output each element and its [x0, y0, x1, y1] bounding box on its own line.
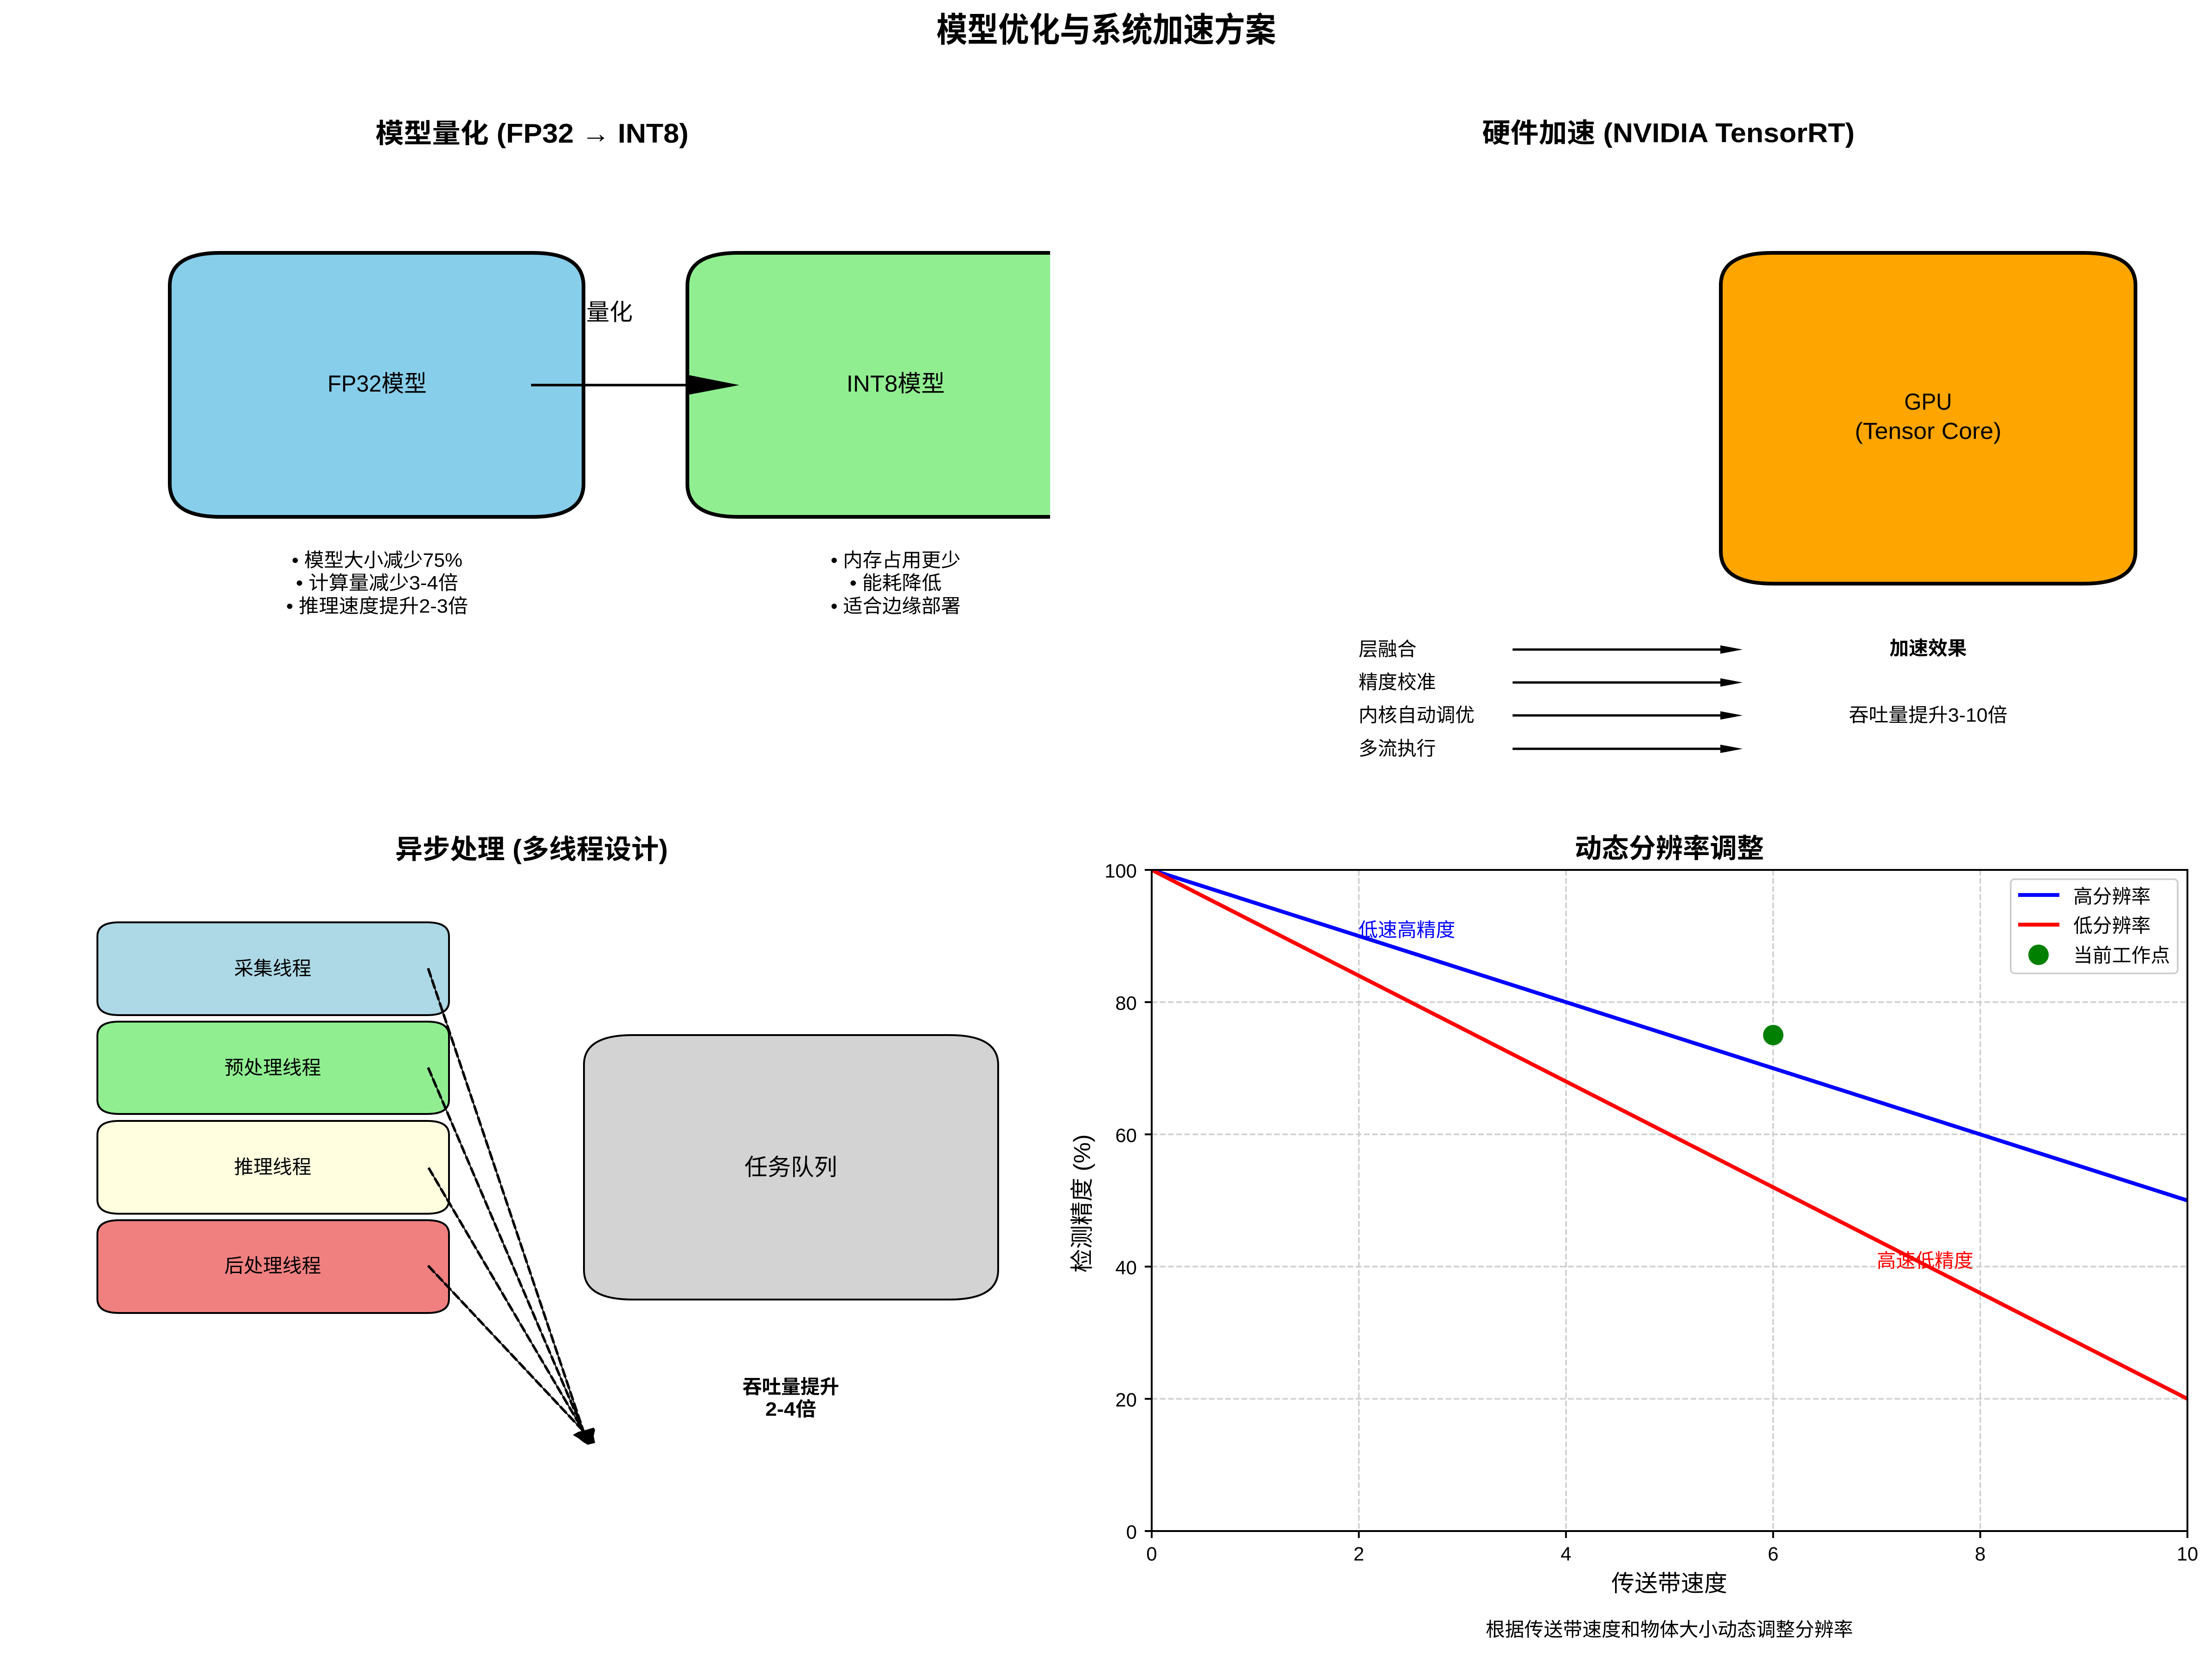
text block: FP32 benefits: • 计算量减少3-4倍	[296, 572, 458, 594]
arrows: threads to queue	[428, 968, 595, 1445]
heading: hardware acceleration: 硬件加速 (NVIDIA TensorRT)	[1482, 118, 1854, 148]
box: postprocessing thread	[97, 1220, 449, 1313]
label: GPU: GPU	[1904, 389, 1952, 415]
box: inference thread	[97, 1121, 449, 1214]
text block: FP32 benefits	[286, 549, 468, 617]
y axis tick labels: 20	[1116, 1389, 1137, 1410]
legend: 当前工作点	[2073, 945, 2170, 966]
box: task queue	[584, 1035, 998, 1300]
feature: precision calibration	[1359, 671, 1743, 693]
heading: dynamic resolution: 动态分辨率调整	[1575, 833, 1764, 864]
label: GPU	[1855, 389, 2001, 444]
label: throughput gain 2-4x: 2-4倍	[765, 1398, 816, 1420]
x axis tick labels: 6	[1768, 1543, 1778, 1564]
feature: layer fusion	[1359, 638, 1743, 660]
x axis tick labels: 2	[1353, 1543, 1364, 1564]
box: postprocessing thread: 后处理线程	[224, 1255, 321, 1277]
y axis tick labels: 60	[1116, 1125, 1137, 1146]
annotation: high speed low accuracy: 高速低精度	[1877, 1250, 1973, 1271]
x axis label: 传送带速度	[1611, 1570, 1727, 1596]
title: 模型优化与系统加速方案	[936, 11, 1276, 49]
panel: model quantization	[170, 119, 1102, 617]
label: FP32 model: FP32模型	[327, 371, 427, 397]
arrow: FP32 to INT8	[531, 374, 739, 395]
line chart: resolution curves	[1152, 870, 2187, 1399]
legend	[2011, 879, 2178, 973]
y axis tick labels: 80	[1116, 992, 1137, 1014]
y axis tick labels: 100	[1104, 860, 1137, 882]
x axis tick labels: 0	[1146, 1543, 1157, 1564]
panel: dynamic resolution chart	[1069, 833, 2198, 1641]
label: throughput gain 2-4x: 吞吐量提升	[743, 1376, 839, 1397]
text block: INT8 benefits: • 适合边缘部署	[831, 595, 961, 617]
y axis label: 检测精度 (%)	[1069, 1134, 1095, 1273]
box: preprocessing thread	[97, 1022, 449, 1114]
label: acceleration effect: 加速效果	[1890, 637, 1967, 659]
y axis tick labels: 40	[1116, 1256, 1137, 1279]
box: inference thread: 推理线程	[234, 1156, 311, 1178]
feature: layer fusion: 层融合	[1359, 638, 1417, 660]
box: task queue: 任务队列	[744, 1154, 837, 1180]
annotation: low speed high accuracy: 低速高精度	[1359, 919, 1455, 941]
feature: multi-stream execution: 多流执行	[1359, 738, 1436, 759]
heading: model quantization: 模型量化 (FP32 → INT8)	[376, 119, 688, 148]
grid lines	[1152, 870, 2187, 1531]
label: throughput gain 2-4x	[743, 1376, 839, 1420]
box: preprocessing thread: 预处理线程	[224, 1057, 321, 1078]
feature: kernel auto tuning: 内核自动调优	[1359, 704, 1475, 726]
caption: 根据传送带速度和物体大小动态调整分辨率	[1486, 1618, 1853, 1641]
legend: 高分辨率	[2073, 885, 2151, 907]
box: INT8 model	[686, 251, 1050, 519]
y axis tick labels: 0	[1126, 1521, 1137, 1543]
text block: INT8 benefits	[831, 549, 961, 617]
panel: async processing	[97, 834, 998, 1445]
legend: 低分辨率	[2073, 915, 2151, 936]
feature: kernel auto tuning	[1359, 704, 1743, 726]
heading: async processing: 异步处理 (多线程设计)	[395, 834, 668, 865]
feature: multi-stream execution	[1359, 738, 1743, 759]
box: GPU	[1721, 253, 2135, 584]
feature: precision calibration: 精度校准	[1359, 671, 1436, 693]
x axis tick labels: 10	[2177, 1543, 2198, 1564]
box: capture thread: 采集线程	[234, 958, 311, 979]
x axis tick labels: 4	[1561, 1543, 1571, 1564]
text block: FP32 benefits: • 模型大小减少75%	[292, 549, 462, 571]
x axis tick labels	[1146, 1543, 2198, 1564]
box: capture thread	[97, 922, 449, 1015]
marker: current operating point	[1763, 1025, 1783, 1045]
x axis tick labels: 8	[1975, 1543, 1986, 1564]
label: GPU: (Tensor Core)	[1855, 418, 2001, 444]
label: quantization: 量化	[586, 299, 633, 325]
label: INT8 model: INT8模型	[846, 371, 945, 397]
text block: INT8 benefits: • 内存占用更少	[831, 549, 961, 571]
panel: hardware acceleration	[1359, 118, 2135, 759]
axes frame and ticks	[1145, 870, 2187, 1538]
text block: FP32 benefits: • 推理速度提升2-3倍	[286, 595, 468, 617]
text block: INT8 benefits: • 能耗降低	[850, 572, 942, 594]
box: FP32 model	[170, 253, 583, 517]
label: throughput gain: 吞吐量提升3-10倍	[1849, 704, 2007, 726]
y axis tick labels	[1104, 860, 1137, 1543]
